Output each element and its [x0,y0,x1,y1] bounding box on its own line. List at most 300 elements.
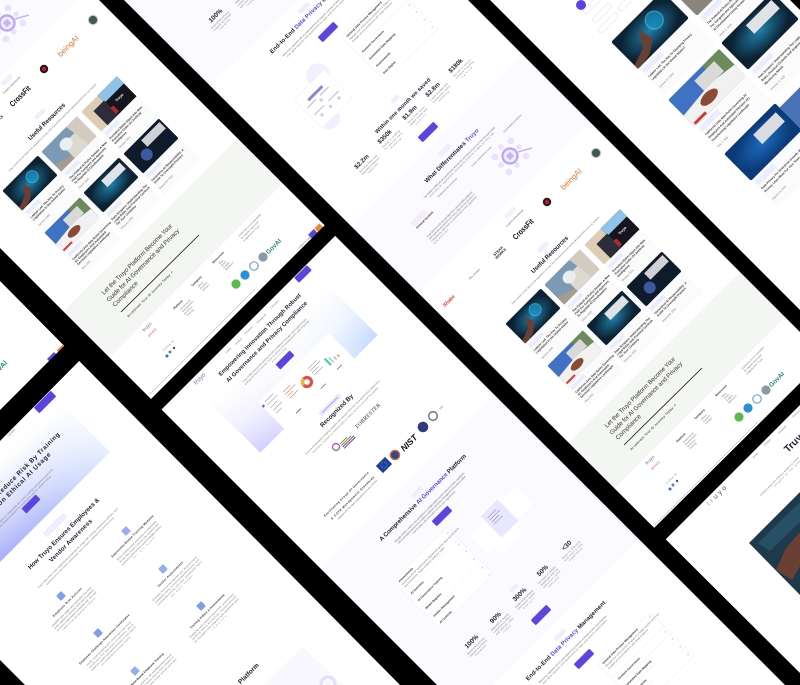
feature: modules [110,514,166,570]
card: people [81,76,158,153]
heading: A Comprehensive AI Governance Platform [378,453,468,543]
feature: vendors: for each vendor [170,574,194,598]
page: main, top of column one [192,265,543,628]
card: california large: Transforming Legislative Landscape [711,103,750,142]
page: main, column one upper remainder (same page, previous scroll): insights from Truyo [242,224,261,242]
footer remnant [0,345,67,379]
page: main, column one upper remainder (same page, previous scroll): for regular news and [240,220,260,240]
ethical AI block: Truyo partners with the top legal firms and provides guidance [425,190,474,238]
stats: Faster assessments [514,588,534,609]
stats: vendor review and [408,107,428,127]
stats [461,535,586,660]
card: robot: December 2024 [158,174,174,190]
dashboard [258,333,355,429]
feature: vendors [147,550,206,609]
badge [34,108,46,120]
page: main, column one upper remainder (same page, previous scroll): Contact [201,283,210,292]
card: lock: Data Scrapers: Understanding The [110,183,148,221]
card: capitol: Path For Congress and Agencies [71,146,107,183]
card: lock large: Data Scrapers: Understanding The Legal [757,35,800,79]
card: capitol: To Regulate AI Development [73,154,105,185]
section text: Truyo helps every team understand acceptable AI usage with training, awareness, policies, and [36,507,119,589]
logos: beingAI [559,167,584,192]
feature: certificates: of compliance across teams [100,635,132,666]
accordion [393,522,499,628]
card: california: Decision Legislative Landscape [76,231,111,266]
feature: videos: Training Videos & Assessments [189,593,226,630]
stats: $180k [447,57,465,75]
labels [436,113,523,198]
accordion: changes across jurisdictions with ready evidence [607,627,649,670]
logo: truyo [192,371,208,386]
hero text: Truyo helps enterprises deploy AI with confidence through automated privacy [241,317,308,384]
heading: Within one month we saved [374,77,433,135]
page: main, column two lower sections (differentiators to footer): Blog [721,391,727,398]
card: robot: Guide To Oversight Practice [656,286,687,318]
card: capitol large: March 3, 2025 [718,22,733,37]
card: california: AI: Employers And Automated [74,230,107,264]
feature: certificates: supports audits and demonstrates a real culture [90,625,137,672]
card: california [547,327,627,407]
logos: The Ounce [468,267,481,281]
stats remnant: 100% [208,7,224,24]
card: hand [505,288,582,365]
feature: modules: AI use, bias, privacy and security concerns with [118,522,160,564]
page: main, column two upper sections [205,0,477,178]
text: Manage models, vendors, and compliance in a single platform built for today's complex regulations [393,471,466,543]
stats [353,52,477,178]
card: capitol: The Federal AI Policy Debate: A New [571,273,611,313]
feature: videos: reinforce ethical AI practices, tracked centrally [191,594,238,641]
card: california large [668,49,773,154]
button [531,605,551,625]
logos [442,148,601,309]
logos: CrossFit [8,84,33,109]
card: lock large: Monitoring Needs [764,64,785,85]
card: network large: August 19, 2024 [771,184,787,201]
accordion: changes across jurisdictions with ready evidence [351,0,393,43]
stats: 50% [536,564,550,578]
card: people: Truyo [618,225,628,236]
button [432,506,452,526]
accordion: General Data Privacy Management [601,627,639,665]
footer lists: Governance [179,298,192,311]
navigation: Home [751,451,760,459]
hero text: and governance tooling, from inventory to assessments and ongoing [243,319,310,386]
page: truyo landing (lower right) [706,383,800,595]
accordion [342,0,442,81]
accordion: Automated AI risk assessments aligned with global legal requirements [400,526,460,586]
page: main, column one upper remainder (same page, previous scroll): Subscribe to our newsletter [237,212,262,237]
logo: medal [332,444,340,450]
feature: policies: so teams understand acceptable use, risk and [55,590,98,632]
stats: $2.2m [353,153,371,171]
footer lists: Training [688,441,698,450]
logo note: ISO [438,404,444,410]
page: main, column two lower sections (differentiators to footer): Company [693,408,706,420]
trusted text: Facilitating Group Of Governance [323,471,370,518]
logos: Shake [442,294,457,309]
button [34,391,56,413]
badge: recognition [318,393,342,417]
logo: forrester: FORRESTER [355,402,382,430]
card: people: Truyo [115,92,125,103]
page: main, column one upper remainder (same page, previous scroll): Company [190,275,203,287]
accordion: Vendor Management [432,594,456,618]
nav button [294,265,312,283]
cta link: Accelerate Your AI Journey Today ↗ [126,270,174,318]
footer lists: Platform [172,299,184,310]
accordion: AI Governance Training [417,575,443,602]
footer logo: privacy [147,327,158,338]
stats: $1.9m [401,104,419,122]
card: lock: For Your Company [115,204,137,226]
footer logo: truyo [141,321,153,333]
stats: 100% [464,633,480,650]
stats: handling [437,89,450,103]
footer base line [150,289,255,394]
card: lock: For Your Company [618,337,640,359]
certification badges [231,238,283,289]
footer lists: Assessments [684,432,698,446]
ethical AI block: General Content [415,210,434,230]
stats: Costs avoided with [429,81,449,102]
card: lock: Legal Risks And Practical Controls [113,185,151,224]
footer logo: privacy [650,460,661,471]
card: lock: February 2025 [119,215,135,230]
logo: truyo [706,484,728,507]
hero text: monitoring [270,346,288,363]
stats: $2.8m [424,81,442,99]
card: robot: December 2024 [661,307,677,323]
cta heading: Compliance [614,413,643,441]
stats remnant 2 [234,0,261,12]
card: lock [83,157,161,234]
navigation: Product [234,337,243,346]
page: main, column one upper remainder (same page, previous scroll): Blog [218,258,224,265]
accordion: Consent Governance [361,29,385,54]
hero button [275,350,295,370]
filter chips [576,0,635,34]
badge [297,1,311,15]
page: main, column one upper remainder (same page, previous scroll): Resources [211,250,225,264]
stats: reduction rates [541,569,562,589]
footer lists [172,293,199,320]
card: hand large: Lawyer Led: The Key To Changing Privacy [647,32,693,78]
footer lists [675,426,702,453]
card: network large: Privacy Laws Mean For Your Team [763,156,800,193]
text: with automated assessments, evidence collection and policy management that reduces effort [397,474,467,545]
card: capitol: Path For Congress and Agencies [574,279,610,316]
footer lists: Inventory [183,304,194,315]
subtext: Collaborating with Industry experts to shape [759,455,800,497]
logo: eu flag [376,457,392,473]
hero gradient [0,403,110,586]
page: main, column one upper remainder (same page, previous scroll): Guides [222,260,231,269]
page: main, column two lower sections (differentiators to footer): insights from Truyo [745,357,764,375]
social: Follow us [665,471,678,485]
section text: assessments that keep employees and vendors aligned with governance [45,515,115,586]
page: training (lower left column) [0,345,343,685]
card: california large: May 7, 2025 [716,135,730,148]
stats: annually [547,575,560,588]
stats: audits [414,112,427,126]
ethical AI block: and policies [432,228,450,245]
accordion: Consent Governance [617,656,641,681]
cta heading: Guide for AI Governance and Privacy [608,360,685,436]
page: main, column one upper remainder (same page, previous scroll): Careers [199,280,209,290]
card: hand large: January 14, 2025 [658,71,675,89]
page: main, column two lower sections (differentiators to footer): for regular news and [743,353,763,373]
card: lock [586,290,664,367]
card: capitol large [670,0,775,43]
page: resources grid (upper right) [576,0,800,208]
stats: overall [522,597,535,610]
heading: Useful Resources [530,234,570,275]
feature: videos: reports [210,614,228,631]
navigation: Home [224,346,233,354]
cta rule [624,368,702,445]
pill [390,94,400,104]
nav: Company [6,427,17,437]
stats: spend [460,65,473,79]
stats: mapping [389,136,402,150]
feature: vendors: Vendor Assessments [157,560,184,588]
trusted text: Aligned with the latest regulations in every market [336,479,378,520]
recognition text: solutions, trusted by enterprises in many sectors around the globe [311,386,379,454]
stats: $350k [376,128,394,146]
logos: WORKS [495,247,508,260]
card: california: California Gets New Rules Governing [574,354,615,394]
page: main, column one upper remainder (same page, previous scroll) [0,5,324,394]
trusted text: & CCPA Management Standards [330,475,376,520]
card: robot: Guide To Oversight Practice [153,153,184,185]
stats: compliance effort [492,614,512,634]
accordion: Data Rights [382,60,397,75]
page: main, column one upper remainder (same page, previous scroll): Webinars [224,260,235,271]
badge [411,486,423,498]
ethical AI block: and experienced advisors for every step of your journey to [428,192,476,241]
page: main, column two lower sections (differentiators to footer): Contact [704,416,713,425]
feature: policies: policy applies to everyday work with AI systems [53,588,95,630]
feature: certificates: Verify understanding with challenges and issue [85,620,132,667]
feature: vendors: Evaluate third parties against your AI governance [151,555,198,602]
card: people: Executive Order On Artificial [111,111,143,143]
trusted by: Trusted by Global Brands [504,208,525,228]
feature: certificates: certificates that document completion, which [88,622,135,669]
card: hand: January 2025 [540,346,554,360]
pill [43,513,67,537]
footer action buttons [297,223,324,250]
card: lock: February 2025 [622,348,638,363]
page: main, column two lower sections (differentiators to footer): Subscribe to our newsletter [740,345,765,370]
stats: 90% [489,611,503,625]
card: capitol: March 2025 [77,176,90,189]
cta heading: Compliance [111,280,140,308]
stats: compliance [568,546,584,562]
card: lock: Data Scrapers: Understanding The [613,316,651,354]
page: main, column two lower sections (differentiators to footer): Careers [702,413,712,423]
card: robot: Generative AI Responsibility: A [653,280,688,315]
stats: today [502,623,512,634]
card: california: Decision Legislative Landscape [579,364,614,399]
card: california: May 2025 [583,392,595,403]
card: network large [724,103,800,208]
product cards [464,482,543,561]
logos: STEAK [493,245,504,257]
logos [0,15,98,127]
stats: Days to onboard [561,540,581,560]
card: california: May 2025 [80,259,92,270]
card: hand large: Legislation In the United States? [650,45,686,81]
badge [537,241,549,253]
card: capitol: March 2025 [580,309,593,322]
card: capitol [41,114,120,193]
stats: and faster audits [516,591,536,611]
stats: handled [474,644,487,657]
feature: certificates: Employee Challenge Awareness Certificates [78,613,131,665]
accordion: Assessments [375,51,392,68]
stats: Automated privacy [466,635,486,656]
platform panel [237,647,343,685]
section heading: How Truyo Ensures Employees & [27,496,101,571]
certification badges [734,371,786,422]
text: Stay current on the latest in AI regulations, privacy law, frameworks and market developments from our experts [510,215,601,305]
accordion: Automated Data Mapping [368,32,396,61]
page: main, column one upper remainder (same page, previous scroll): About [197,280,204,288]
card: hand: Lawyer Led: The Key To Privacy [29,184,65,219]
section heading: Vendor Awareness [48,518,94,564]
card: california large: Employers And Automated Decision Act [707,96,751,139]
navigation: Resources [255,312,268,324]
logo: blue seal [418,422,428,432]
feature: videos: for managers with progress and completion data [193,597,240,644]
icon: magnifier [492,138,532,175]
stats: Saved in fines and [358,153,378,174]
card: california large: California Gets New Rules Governing AI: [704,92,748,136]
feature: modules: for all staff [132,536,156,560]
feature: certificates [78,613,142,677]
icon: magnifier [0,5,29,42]
card: hand large [611,0,716,96]
accordion: General Data Privacy Management [345,0,383,38]
accordion: Manage your entire privacy program in a single location and track [604,611,660,668]
cta rule [121,235,199,312]
stats: Increase in vendor [537,565,557,585]
certification badges: GovAI [265,238,283,256]
icon tiles [56,526,206,676]
card: hand: Legislation In the United States [535,320,569,355]
page: main, column two lower sections (differentiators to footer): Resources [714,383,728,397]
card: lock: Legal Risks And Practical Controls [616,318,654,357]
ethical AI block: compliance, with built in monitoring of new regulation [430,194,478,243]
hero image [749,492,800,595]
social [665,471,678,490]
feature: policies: Establish clear usage rules and explain how each [51,585,93,627]
accordion: Model Registry [424,592,443,610]
footer remnant: Contact Us | Login [34,361,49,377]
logo: nist: NIST [398,432,420,453]
accordion [598,608,698,685]
text: Stay current on the latest in AI regulations, privacy law, frameworks and market developments from our experts [7,82,98,172]
footer lists: Inventory [686,437,697,448]
hero title: AI Governance and Privacy Compliance [226,300,310,384]
footer base line [653,422,758,527]
logo: striped [340,433,356,449]
cta heading: Let the Truyo Platform Become Your [603,356,677,429]
accordion: and frameworks, keeps evidence ready for audits [403,545,446,588]
card: california: California Gets New Rules Governing [71,221,112,261]
card: capitol: To Regulate AI Development [576,287,608,318]
page: main, column two lower sections (differentiators to footer) [410,113,786,527]
stats: and internal costs [494,616,515,636]
card: partial blue [779,57,800,135]
privacy illustration [285,58,362,135]
card: california: AI: Employers And Automated [577,363,610,397]
card: capitol [544,247,623,326]
card: hand: Legislation In the United States [32,187,66,222]
card: robot: Generative AI Responsibility: A [150,147,185,182]
stats: Saved in yearly [452,57,472,78]
card: people: Intelligence [113,130,128,145]
footer logo [141,321,158,338]
stats: Value from faster [406,105,426,125]
logo: red seal [390,450,400,460]
hero title [0,431,61,538]
badge [438,143,452,157]
card: people: President Biden Signs Into New [108,105,144,140]
labels: Reduced risk exposure [436,176,458,198]
heading: What Differentiates Truyo [424,128,481,185]
accordion: AI Inventory [410,580,425,595]
feature: vendors: standards using structured questionnaires, with [154,557,201,604]
logos: CrossFit [511,217,536,242]
feature: policies: reporting obligations clearly [61,596,97,631]
text: and enables safe innovation across your organization [411,489,457,535]
comprehensive section [378,453,543,628]
navigation [224,298,280,354]
stats remnant: Automated privacy [210,9,230,30]
card: people: October 2024 [620,268,635,282]
card: hand [2,155,79,232]
ethical AI block [410,190,481,245]
card: lock large [721,0,800,97]
stats: regulatory exposure [360,156,380,176]
card: robot [123,118,200,195]
stats: automated rights [431,84,452,104]
feature: modules: Short modules build awareness of responsible [116,519,158,561]
cta link: Accelerate Your AI Journey Today ↗ [629,403,677,451]
navigation: Solutions [243,325,254,335]
social [162,338,175,358]
footer lists: Assessments [181,299,195,313]
stats: and start a new [563,542,583,562]
footer logo: truyo [644,454,656,466]
stats: software licensing [454,60,474,80]
card: people: Executive Order On Artificial [614,244,646,276]
feature: role-based [126,648,178,685]
card: hand: January 2025 [37,213,51,227]
trusted by: Trusted by Global Brands [1,75,22,95]
pill [509,583,519,593]
accordion: Assessments [398,566,414,583]
navigation: Product [763,438,772,447]
navigation [751,406,800,459]
text: and rights requests with dashboards for legal and security stakeholders [541,618,608,685]
feature: policies [46,581,100,635]
stats: Reduction in manual [490,612,510,632]
labels: Lower compliance costs [470,145,493,167]
